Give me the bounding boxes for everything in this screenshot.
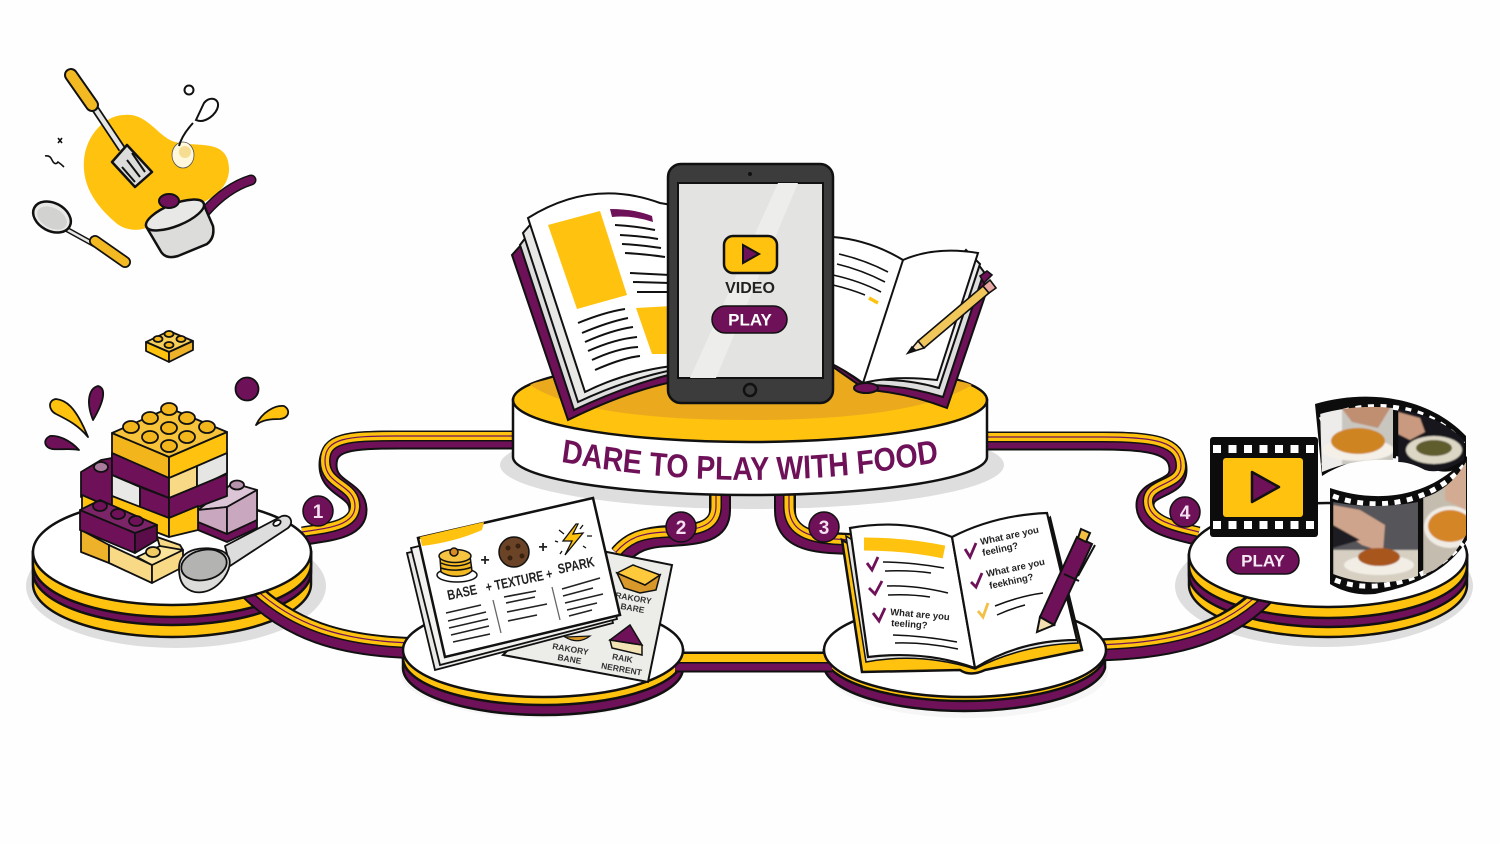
check marks <box>867 543 988 621</box>
back card: RAKORY <box>615 590 653 606</box>
savory bake dish <box>617 565 660 593</box>
pancake stack icon <box>437 548 477 582</box>
spatula <box>71 75 152 187</box>
question text: teeling? <box>891 618 928 632</box>
back card <box>503 552 672 682</box>
question text: What are you <box>890 607 950 623</box>
platform tops <box>33 499 1467 697</box>
flat film frame <box>1210 437 1318 537</box>
highlight bar <box>864 544 944 552</box>
notebook lines <box>833 254 888 295</box>
play button <box>1227 547 1299 574</box>
spark bolt icon <box>555 524 592 555</box>
plus sign 1: + <box>480 552 490 569</box>
step number 1 <box>303 496 333 526</box>
plus sign 2: + <box>538 539 548 556</box>
platform 4 side bands <box>1189 555 1467 637</box>
journal cover <box>842 518 1082 674</box>
question text: feeling? <box>981 541 1019 559</box>
step number 3: 3 <box>819 518 829 539</box>
saucepan <box>142 180 251 257</box>
road: platform 1 to center <box>302 436 520 536</box>
front card <box>418 498 620 657</box>
back card: BARE <box>620 601 646 615</box>
pen <box>1037 529 1095 632</box>
step number 4 <box>1170 497 1200 527</box>
open magazine left of tablet <box>512 193 672 420</box>
front card: + TEXTURE + <box>484 565 554 595</box>
platform 2 side bands <box>403 650 683 715</box>
road: center to platform 4 <box>980 437 1199 536</box>
journal lines <box>883 562 1043 649</box>
splashes <box>45 378 288 450</box>
ground shadows <box>26 421 1473 718</box>
magazine photo blocks <box>548 211 627 309</box>
photo: chef plating <box>1333 502 1418 582</box>
central platform <box>512 369 988 496</box>
infographic canvas <box>26 68 1473 716</box>
column text lines <box>446 578 603 642</box>
question text: What are you <box>979 525 1040 548</box>
egg and drip <box>172 86 218 168</box>
video label: VIDEO <box>725 280 775 297</box>
photo: plated pasta <box>1320 405 1395 475</box>
dessert slice <box>610 625 642 655</box>
step number 2 <box>666 512 696 542</box>
right page <box>952 513 1077 668</box>
step number 1: 1 <box>313 502 324 523</box>
road: center to platform 3 <box>785 481 854 544</box>
front bricks <box>80 500 183 583</box>
front card: SPARK <box>556 553 596 577</box>
video icon <box>724 236 777 273</box>
platform 3 side bands <box>824 650 1105 711</box>
film strips and video on platform 4 <box>1210 397 1476 595</box>
reflection journal on platform 3 <box>842 513 1095 674</box>
platform 1 side bands <box>33 552 311 637</box>
recipe cards on platform 2 <box>407 498 672 682</box>
upper curved film strip <box>1315 397 1466 476</box>
back card: BANE <box>557 652 583 666</box>
play button <box>712 306 787 333</box>
road: platform 3 to platform 4 <box>1095 583 1270 650</box>
back card: NERRENT <box>600 661 643 678</box>
right block <box>198 480 257 542</box>
kitchen tools cluster <box>28 75 251 262</box>
lower curved film strip <box>1330 456 1467 594</box>
play button: PLAY <box>728 310 773 330</box>
yellow blob <box>84 115 229 230</box>
magazine text lines <box>578 225 670 370</box>
question text <box>890 525 1046 632</box>
play button: PLAY <box>1241 552 1286 570</box>
step number 4: 4 <box>1180 503 1191 524</box>
tower <box>112 403 227 537</box>
tablet <box>668 164 833 403</box>
left page <box>850 525 975 668</box>
banner title: DARE TO PLAY WITH FOOD <box>562 440 936 480</box>
back card: RAKORY <box>552 641 590 657</box>
road: platform 1 to platform 2 <box>248 583 413 648</box>
back card: RAIK <box>611 651 634 665</box>
spoon <box>28 195 125 262</box>
road: platform 2 to platform 3 <box>675 658 832 662</box>
column labels: BASE <box>446 581 478 603</box>
measuring spoon <box>178 516 291 592</box>
hidden dish edge <box>565 636 590 641</box>
step number 3 <box>809 512 839 542</box>
back left block <box>81 458 112 520</box>
question text: feekhing? <box>988 572 1035 592</box>
photo: rice plate <box>1423 462 1466 575</box>
card stack sheets <box>407 505 617 670</box>
pencil <box>908 271 996 353</box>
sparkle marks <box>45 138 64 167</box>
road: center to platform 2 <box>616 481 720 556</box>
lego stack <box>45 331 291 592</box>
question text: What are you <box>985 557 1046 580</box>
step number 2: 2 <box>676 518 686 539</box>
cookie icon <box>499 537 529 567</box>
open notebook right of tablet <box>826 237 996 408</box>
photo: sauce bowl <box>1398 409 1464 472</box>
floating brick <box>146 331 193 362</box>
notebook cover ribbon <box>854 383 878 393</box>
